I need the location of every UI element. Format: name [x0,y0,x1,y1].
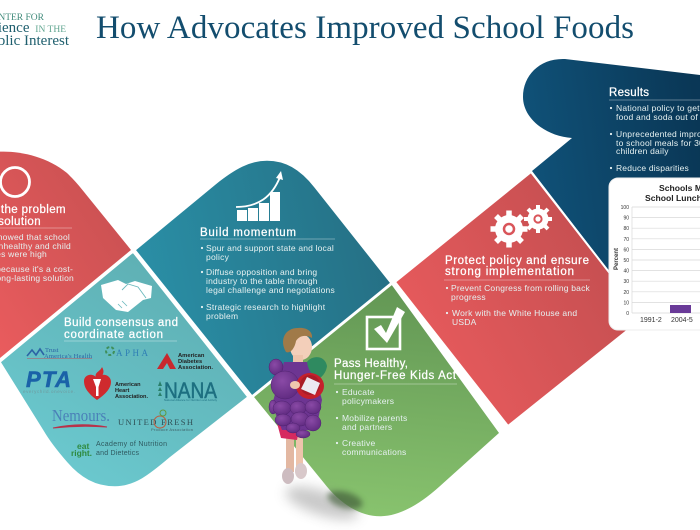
icon: rising bar chart [236,171,283,221]
text: momentum bullets: industry to the table through [206,276,318,286]
logo: Nemours: Nemours. [52,406,110,425]
text: results bullets: Reduce disparities [616,163,689,173]
bar chart: Percent [614,248,620,270]
bar chart: 60 [623,247,629,253]
text: momentum bullets: problem [206,311,238,321]
logo: American Heart Association: American [115,382,141,388]
logo: American Diabetes Association [157,353,213,371]
text: act bullets: communications [342,447,406,457]
logo: APHA [106,347,148,358]
text: act bullets: Educate [342,387,375,397]
panel: protect policy [395,172,640,426]
logo: United Fresh: UNITED FRESH [118,417,193,427]
text: protect bullets: progress [451,292,486,302]
text: momentum bullets: legal challenge and negotiations [206,285,335,295]
logo: American Diabetes Association: American [178,353,205,359]
bar chart: 50 [623,258,629,264]
text: protect bullets [446,283,591,327]
bar chart: 0 [626,311,629,317]
heading: problem [0,204,66,228]
child in grape costume [269,328,364,526]
text: act bullets: Mobilize parents [342,413,407,423]
icon: checkbox [367,307,405,349]
heading: pass healthy: Hunger-Free Kids Act [334,370,457,382]
text: problem bullets [0,232,74,283]
bar chart: 100 [621,205,629,211]
logo: Trust for America's Health [27,347,93,360]
heading: build consensus: Build consensus and [64,317,178,329]
bar chart: 40 [623,269,629,275]
logo: Academy of Nutrition and Dietetics: Academy of Nutrition [96,441,167,448]
logo: Center for Science in the Public Interest: IN THE [35,25,66,35]
bar chart: 80 [623,226,629,232]
logo: Center for Science in the Public Interest [0,13,70,49]
logo: PTA: everychild.onevoice. [23,389,75,394]
text: momentum bullets: policy [206,252,230,262]
logo: Academy of Nutrition and Dietetics [71,441,167,458]
panel: identify the problem [0,152,131,358]
logo: APHA: APHA [116,348,148,358]
heading: pass healthy: Pass Healthy, [334,358,408,370]
heading: protect policy: strong implementation [445,266,574,278]
logo: American Heart Association [84,367,148,400]
logo: Trust for America's Health: America's Health [44,353,93,360]
heading: build consensus [64,317,178,341]
logo: American Heart Association: Association. [115,394,148,400]
logo: American Diabetes Association: Association. [178,365,213,371]
logo: Academy of Nutrition and Dietetics: right. [71,448,92,458]
logo: PTA: PTA [26,367,71,392]
heading: results: Results [609,87,649,99]
title: How Advocates Improved School Foods [96,10,634,46]
logo: United Fresh [118,410,193,432]
text: act bullets: policymakers [342,396,394,406]
text: protect bullets: Work with the White House and [452,308,577,318]
icon: handshake [101,280,152,312]
logo: NANA: National Alliance for Nutrition and Activity [164,398,218,402]
heading: protect policy: Protect policy and ensure [445,255,589,267]
bar chart: 90 [623,216,629,222]
text: momentum bullets: Strategic research to highlight [206,302,326,312]
bar chart: 30 [623,279,629,285]
panel: build consensus [0,252,248,487]
logo: NANA: NANA [164,378,217,403]
panel: chart card [609,178,700,330]
text: protect bullets: Prevent Congress from rolling back [451,283,591,293]
bar chart: 10 [623,300,629,306]
panel: results [523,59,700,325]
logo: American Heart Association: Heart [115,388,129,394]
heading: build momentum: Build momentum [200,227,296,239]
icon: circle [0,168,30,196]
text: results bullets [610,103,700,173]
bar chart: 1991-2 [640,317,662,324]
heading: build consensus: coordinate action [64,329,163,341]
logo: Trust for America's Health: Trust [45,347,59,354]
logo: United Fresh: Produce Association [151,427,193,432]
panel: pass healthy hunger-free kids act [253,284,500,517]
text: momentum bullets [201,243,335,321]
logo: Academy of Nutrition and Dietetics: eat [77,441,89,451]
bar chart: 20 [623,290,629,296]
heading: problem: the problem [1,204,66,216]
panel: build momentum [135,160,391,396]
logo: American Diabetes Association: Diabetes [178,359,202,365]
text: act bullets: Creative [342,438,375,448]
text: results bullets: children daily [616,146,669,156]
heading: protect policy [445,255,589,278]
bar chart [614,205,700,324]
text: act bullets [336,387,407,457]
text: momentum bullets: Spur and support state and local [206,243,334,253]
chart title [645,183,700,203]
bar chart: 2004-5 [671,317,693,324]
text: momentum bullets: Diffuse opposition and bring [206,267,317,277]
heading: pass healthy [334,358,457,382]
text: act bullets: and partners [342,422,392,432]
logo: Academy of Nutrition and Dietetics: and Dietetics [96,450,140,457]
bar chart: 70 [623,237,629,243]
icon: gears [490,205,552,248]
text: protect bullets: USDA [452,317,477,327]
